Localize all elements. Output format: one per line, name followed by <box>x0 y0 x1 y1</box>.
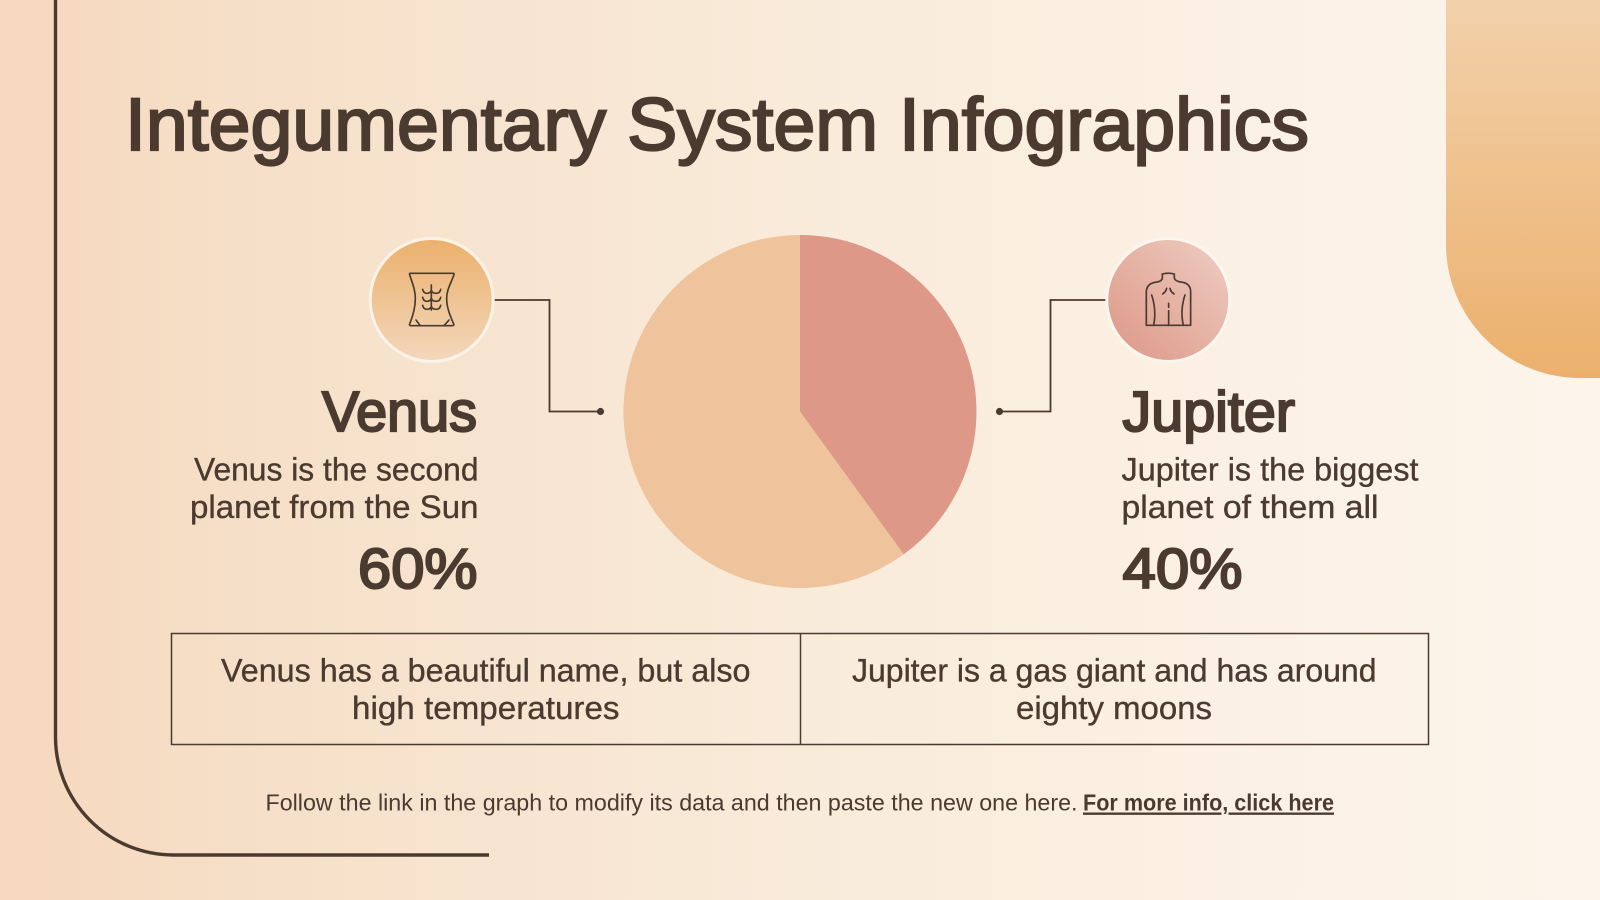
table cell: Venus <box>221 652 750 726</box>
footer note: Follow the link in the graph to modify its data and then paste the new one here. <box>266 790 1078 816</box>
icon: Venus abdomen <box>370 238 493 362</box>
text block: Jupiter description: planet of them all <box>1122 489 1378 525</box>
table cell: Jupiter <box>852 652 1376 726</box>
text block: Jupiter description <box>1122 452 1419 525</box>
text block: Venus description <box>190 452 478 525</box>
table <box>172 634 1428 744</box>
heading: Jupiter: Jupiter <box>1122 380 1295 444</box>
slice: Venus 60% <box>623 235 904 588</box>
corner shape: top right <box>1446 0 1600 378</box>
table cell: Venus: high temperatures <box>352 690 620 726</box>
footer note: For more info, click here <box>1083 790 1334 816</box>
value: Jupiter 40%: 40% <box>1122 537 1242 601</box>
table cell: Venus: Venus has a beautiful name, but also <box>221 652 750 688</box>
title: Integumentary System Infographics <box>125 83 1309 166</box>
connector: Venus <box>494 300 604 415</box>
pie chart <box>623 235 976 588</box>
table cell: Jupiter: Jupiter is a gas giant and has around <box>852 652 1376 688</box>
text block: Venus description: Venus is the second <box>194 452 478 488</box>
text block: Venus description: planet from the Sun <box>190 489 478 525</box>
slice: Jupiter 40% <box>800 235 976 554</box>
frame line: left and bottom <box>56 0 489 855</box>
connector: Jupiter <box>996 300 1106 415</box>
value: Venus 60%: 60% <box>358 537 478 601</box>
icon: Jupiter back <box>1107 238 1230 362</box>
heading: Venus: Venus <box>322 380 477 444</box>
table cell: Jupiter: eighty moons <box>1016 690 1212 726</box>
text block: Jupiter description: Jupiter is the biggest <box>1122 452 1419 488</box>
